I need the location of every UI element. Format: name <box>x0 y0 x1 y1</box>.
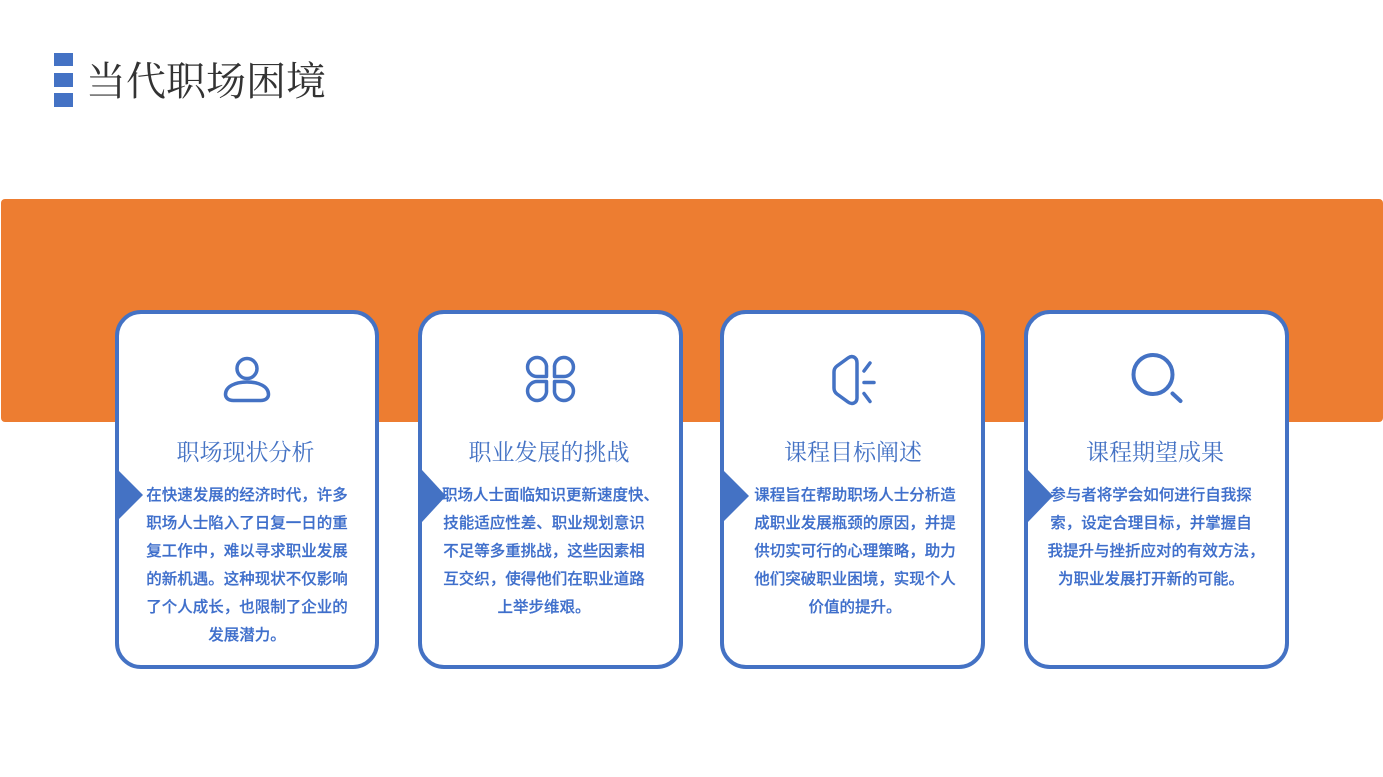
text: 课程目标阐述 body: 价值的提升。 <box>808 599 902 616</box>
heading: 课程期望成果: 课程期望成果 <box>1086 440 1224 465</box>
text: 职场现状分析 body: 的新机遇。这种现状不仅影响 <box>146 571 348 588</box>
text: 课程期望成果 body: 为职业发展打开新的可能。 <box>1058 571 1244 588</box>
text: 职业发展的挑战 body: 不足等多重挑战，这些因素相 <box>443 543 645 560</box>
panel: 课程期望成果 <box>1024 310 1289 669</box>
text: 课程期望成果 body: 参与者将学会如何进行自我探 <box>1050 487 1252 504</box>
text: 职场现状分析 body <box>146 486 348 644</box>
heading: 职业发展的挑战: 职业发展的挑战 <box>468 440 630 465</box>
panel: 课程目标阐述 <box>720 310 985 669</box>
text: 课程期望成果 body <box>1047 486 1264 588</box>
text: 职业发展的挑战 body: 技能适应性差、职业规划意识 <box>443 515 645 532</box>
arrow marker 2 <box>422 470 446 522</box>
text: 课程期望成果 body: 索，设定合理目标，并掌握自 <box>1050 515 1252 532</box>
title: 当代职场困境 <box>86 59 326 104</box>
panel: 职业发展的挑战 <box>418 310 683 669</box>
heading: 课程目标阐述: 课程目标阐述 <box>784 440 922 465</box>
text: 课程目标阐述 body: 供切实可行的心理策略，助力 <box>754 543 956 560</box>
arrow marker 4 <box>1028 470 1052 522</box>
arrow marker 1 <box>119 471 143 519</box>
orange band <box>1 199 1383 422</box>
text: 职场现状分析 body: 发展潜力。 <box>208 627 286 644</box>
title bullet icon <box>54 53 73 107</box>
text: 职业发展的挑战 body: 上举步维艰。 <box>497 599 590 616</box>
text: 课程目标阐述 body: 他们突破职业困境，实现个人 <box>754 571 956 588</box>
arrow marker 3 <box>724 471 749 521</box>
text: 课程目标阐述 body: 成职业发展瓶颈的原因，并提 <box>754 515 956 532</box>
text: 课程目标阐述 body <box>754 486 956 616</box>
text: 职业发展的挑战 body: 互交织，使得他们在职业道路 <box>443 571 645 588</box>
text: 职场现状分析 body: 复工作中，难以寻求职业发展 <box>146 543 348 560</box>
text: 课程目标阐述 body: 课程旨在帮助职场人士分析造 <box>754 487 956 504</box>
text: 职场现状分析 body: 在快速发展的经济时代，许多 <box>146 487 348 504</box>
text: 课程期望成果 body: 我提升与挫折应对的有效方法， <box>1047 543 1264 560</box>
text: 职业发展的挑战 body <box>442 486 659 616</box>
text: 职场现状分析 body: 职场人士陷入了日复一日的重 <box>146 515 348 532</box>
panel: 职场现状分析 <box>115 310 379 669</box>
heading: 职场现状分析: 职场现状分析 <box>176 440 314 465</box>
text: 职场现状分析 body: 了个人成长，也限制了企业的 <box>146 599 348 616</box>
text: 职业发展的挑战 body: 职场人士面临知识更新速度快、 <box>442 487 659 504</box>
